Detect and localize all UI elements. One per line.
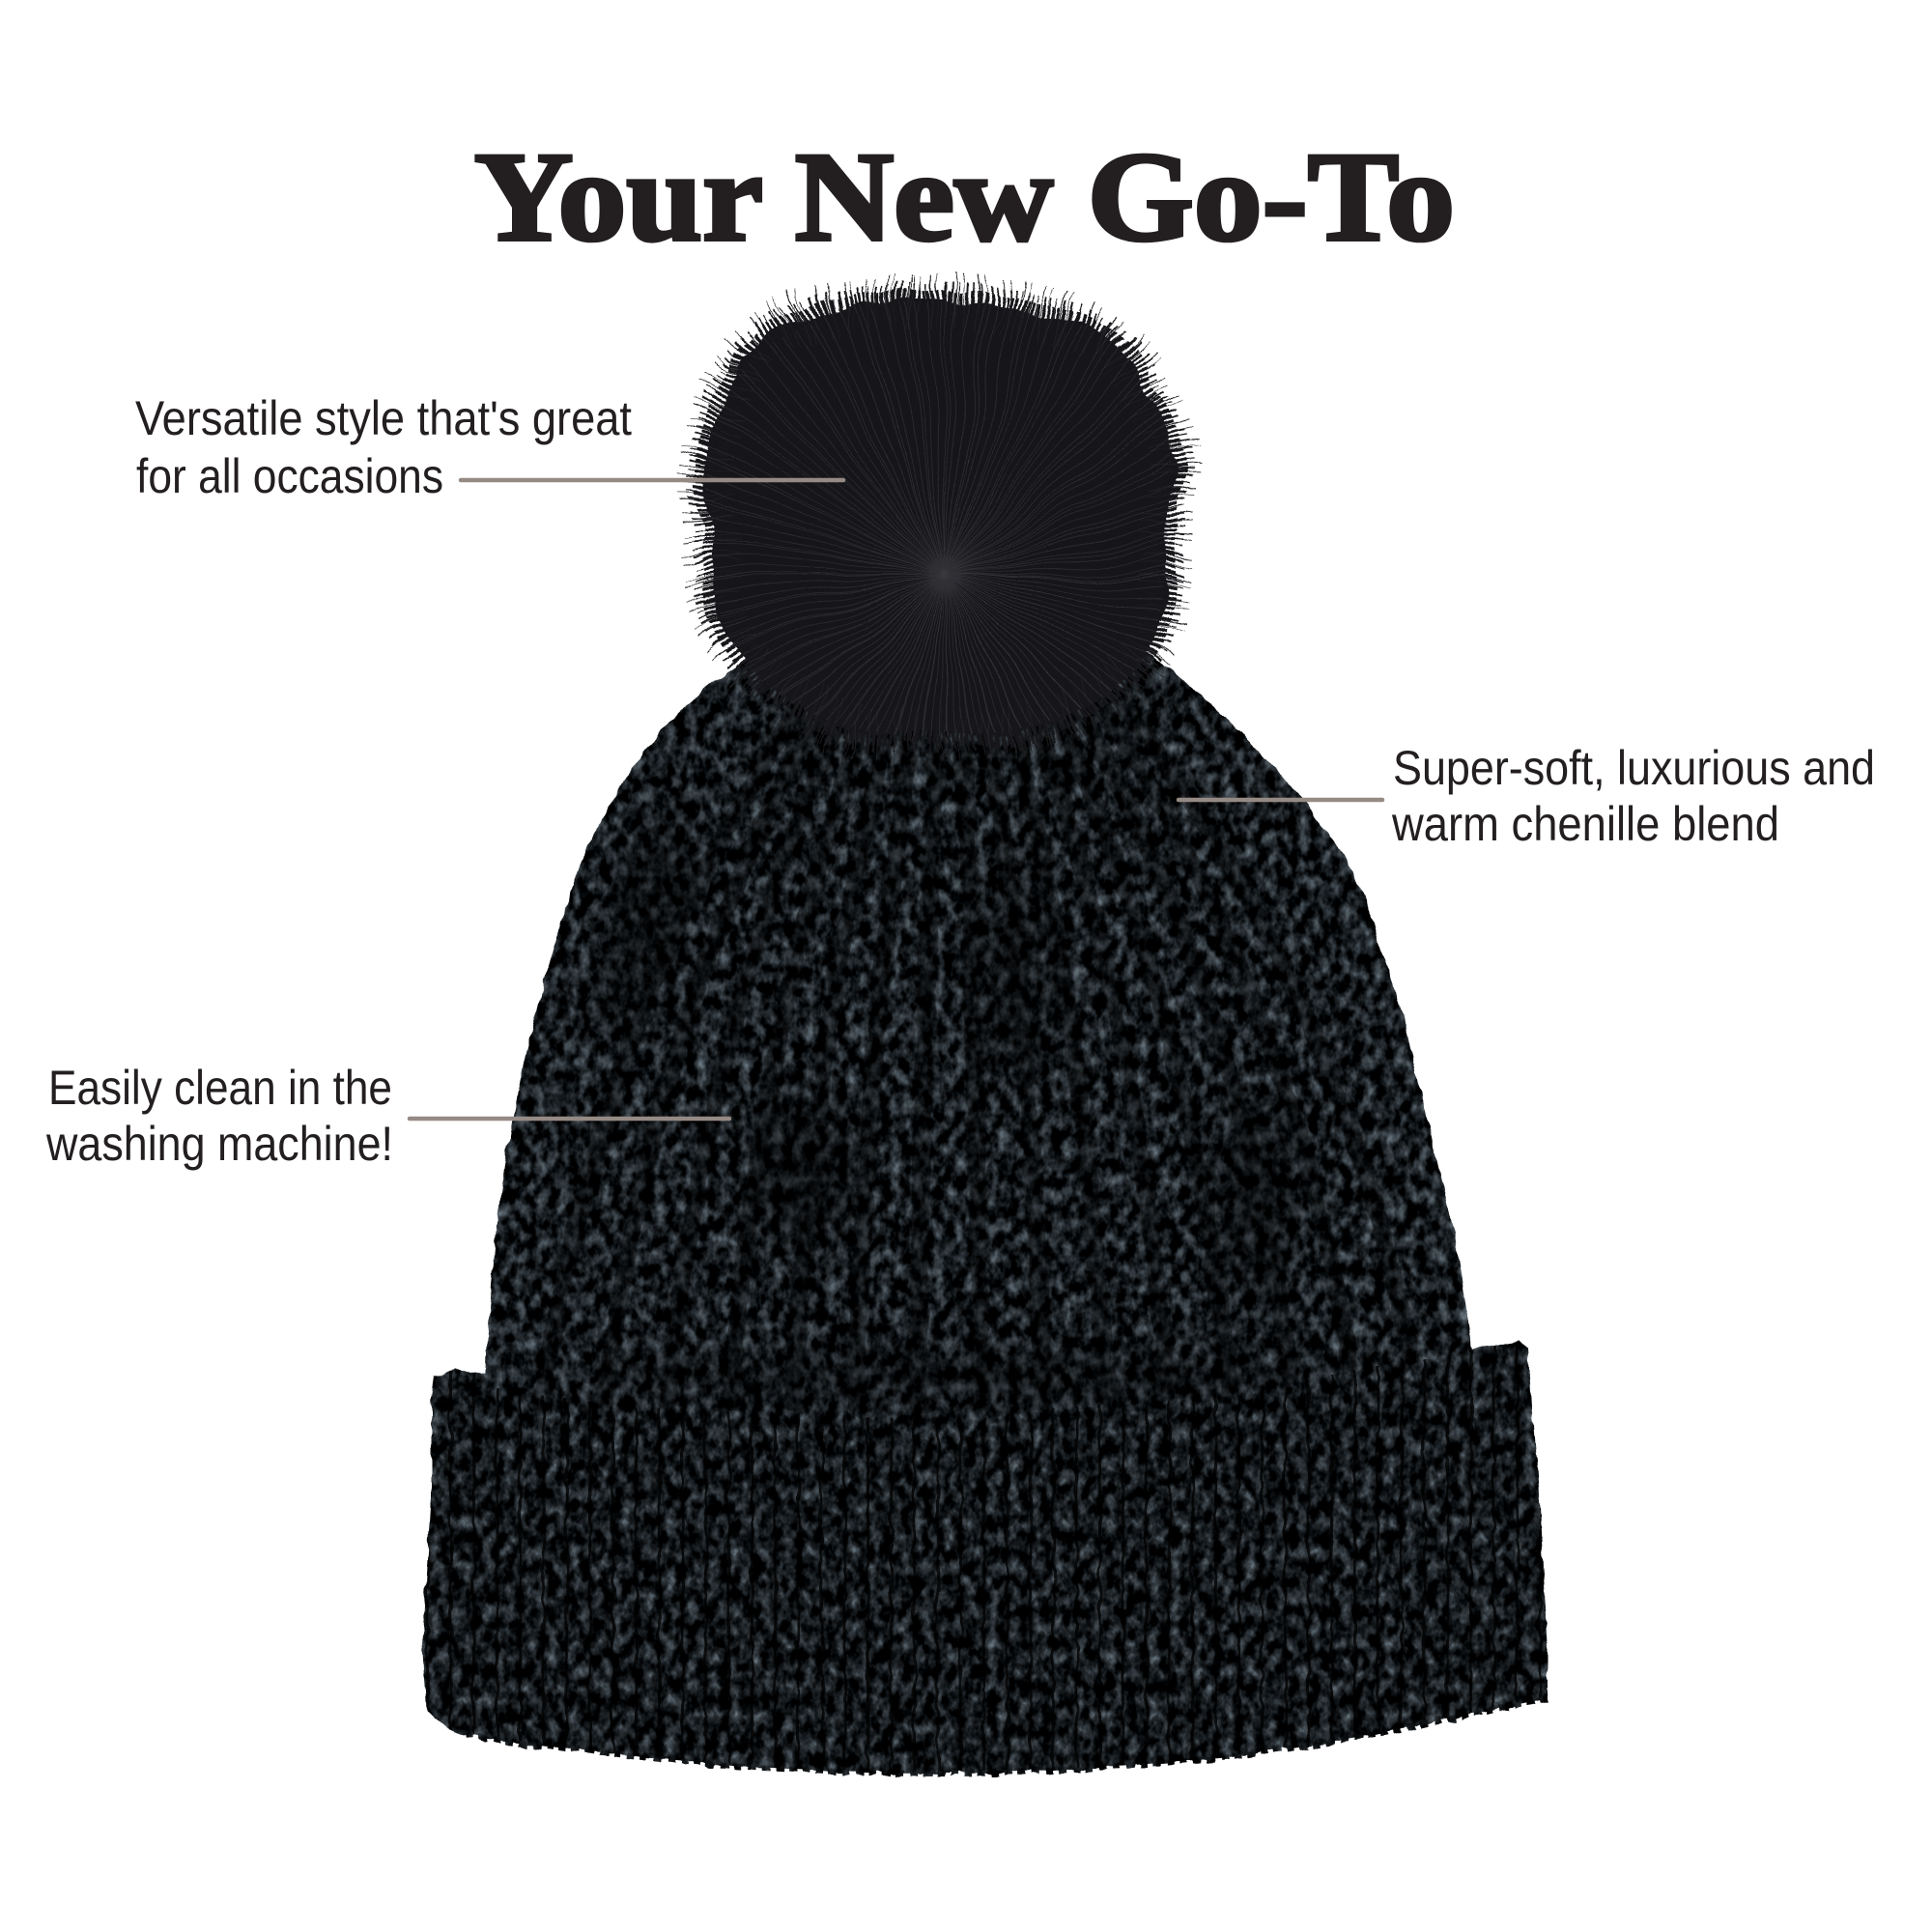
callout: versatile style: for all occasions <box>136 449 443 503</box>
title: Your New Go-To <box>474 126 1455 268</box>
callout: chenille blend <box>1179 741 1875 851</box>
hat body <box>483 638 1478 1468</box>
callout: versatile style <box>135 391 843 503</box>
callout: washing machine: washing machine! <box>45 1117 393 1171</box>
pom-pom <box>705 301 1172 736</box>
hat folded brim <box>422 1340 1548 1774</box>
callout: versatile style: Versatile style that's great <box>135 391 632 445</box>
callout: washing machine <box>45 1061 729 1171</box>
hat illustration <box>422 638 1548 1774</box>
pom-pom outer fur fringe <box>705 301 1172 736</box>
callout: chenille blend: Super-soft, luxurious and <box>1393 741 1875 795</box>
pom-pom fur streaks <box>803 432 1093 722</box>
callout: chenille blend: warm chenille blend <box>1391 797 1779 851</box>
callout: washing machine: Easily clean in the <box>48 1061 392 1115</box>
